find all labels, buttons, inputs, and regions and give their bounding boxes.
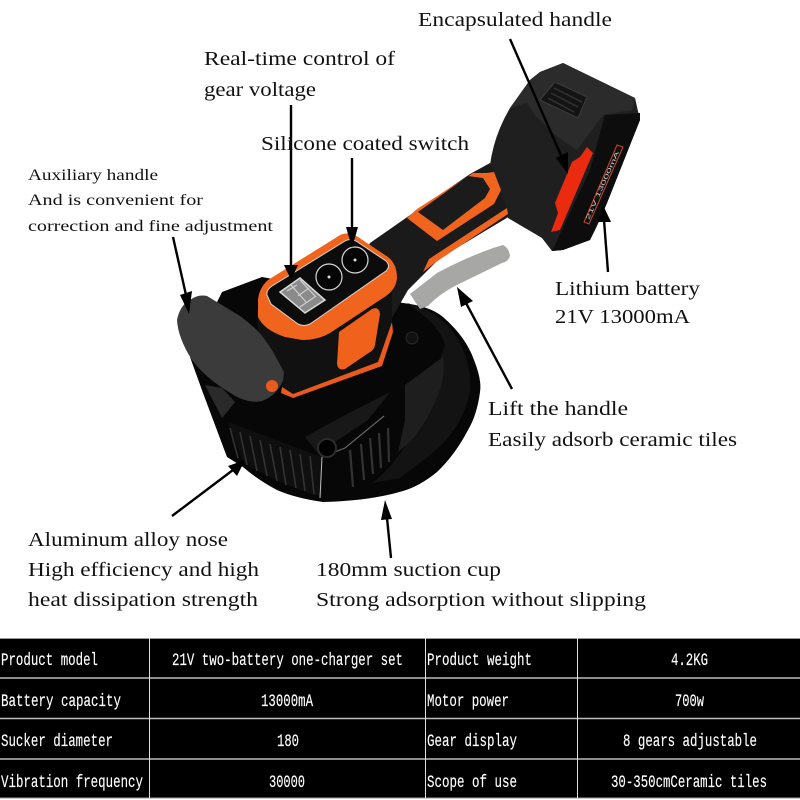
row 4: Scope of use <box>427 773 517 793</box>
control panel <box>258 233 397 340</box>
base gloss and shell <box>205 303 470 498</box>
auxiliary handle <box>177 296 284 402</box>
label: lift the handle: Easily adsorb ceramic tiles <box>488 429 737 451</box>
arrow: encapsulated handle <box>510 39 568 174</box>
label: auxiliary handle <box>28 167 274 235</box>
tool head body <box>257 268 392 398</box>
row 3: 180 <box>277 732 299 752</box>
label: suction cup: Strong adsorption without slipping <box>316 589 646 611</box>
row 2 <box>1 692 704 712</box>
label: encapsulated handle: Encapsulated handle <box>418 9 612 31</box>
label: aluminum alloy nose <box>28 529 259 611</box>
row 4: Vibration frequency <box>1 773 143 793</box>
arrow: auxiliary handle <box>173 237 192 314</box>
metal lift lever <box>410 245 510 309</box>
arrow: gear voltage <box>284 105 298 280</box>
row 1: Product weight <box>427 651 532 671</box>
specification table <box>0 638 800 798</box>
battery label: 21V 13000mA <box>585 150 621 221</box>
label: lithium battery: 21V 13000mA <box>555 306 691 328</box>
arrow: lithium battery <box>598 205 611 272</box>
row 3 <box>1 732 757 752</box>
label: lift the handle <box>488 398 737 451</box>
arrow: silicone switch <box>346 158 358 248</box>
battery pack <box>490 63 640 251</box>
arrow: aluminum nose <box>172 460 245 516</box>
digital display <box>280 278 325 313</box>
row 1: 4.2KG <box>671 651 708 671</box>
row 3: Sucker diameter <box>1 732 113 752</box>
row 1: 21V two-battery one-charger set <box>172 651 403 671</box>
row 4 <box>1 773 767 793</box>
arrow: lift handle <box>457 287 512 389</box>
row 2: 700w <box>675 692 704 712</box>
label: suction cup <box>316 559 646 611</box>
row 3: Gear display <box>427 732 517 752</box>
row 2: Motor power <box>427 692 509 712</box>
orange side button <box>337 308 380 369</box>
label: aluminum alloy nose: High efficiency and high <box>28 559 259 581</box>
handle grip <box>340 163 510 330</box>
label: auxiliary handle: Auxiliary handle <box>28 167 158 184</box>
label: aluminum alloy nose: heat dissipation strength <box>28 589 258 611</box>
suction cup base <box>190 277 480 502</box>
red battery latch <box>551 147 593 232</box>
product: tile vibration tool <box>177 63 640 502</box>
label: gear voltage control: Real-time control of <box>204 48 395 70</box>
button: switch <box>342 247 368 273</box>
label: lithium battery: Lithium battery <box>555 278 700 300</box>
label: auxiliary handle: And is convenient for <box>28 192 204 209</box>
label: aluminum alloy nose: Aluminum alloy nose <box>28 529 228 551</box>
battery label <box>584 145 623 224</box>
label: gear voltage control <box>204 48 395 101</box>
arrow: suction cup <box>381 500 392 558</box>
label: gear voltage control: gear voltage <box>204 79 316 101</box>
orange stripe <box>281 322 393 398</box>
label: suction cup: 180mm suction cup <box>316 559 501 581</box>
label: lift the handle: Lift the handle <box>488 398 628 420</box>
button: gear <box>316 264 342 290</box>
label: auxiliary handle: correction and fine adjustment <box>28 218 274 235</box>
label: silicone switch: Silicone coated switch <box>261 133 469 155</box>
row 2: Battery capacity <box>1 692 121 712</box>
row 1: Product model <box>1 651 98 671</box>
row 4: 30000 <box>269 773 305 793</box>
row 2: 13000mA <box>261 692 313 712</box>
label: lithium battery <box>555 278 700 328</box>
row 1 <box>1 651 708 671</box>
